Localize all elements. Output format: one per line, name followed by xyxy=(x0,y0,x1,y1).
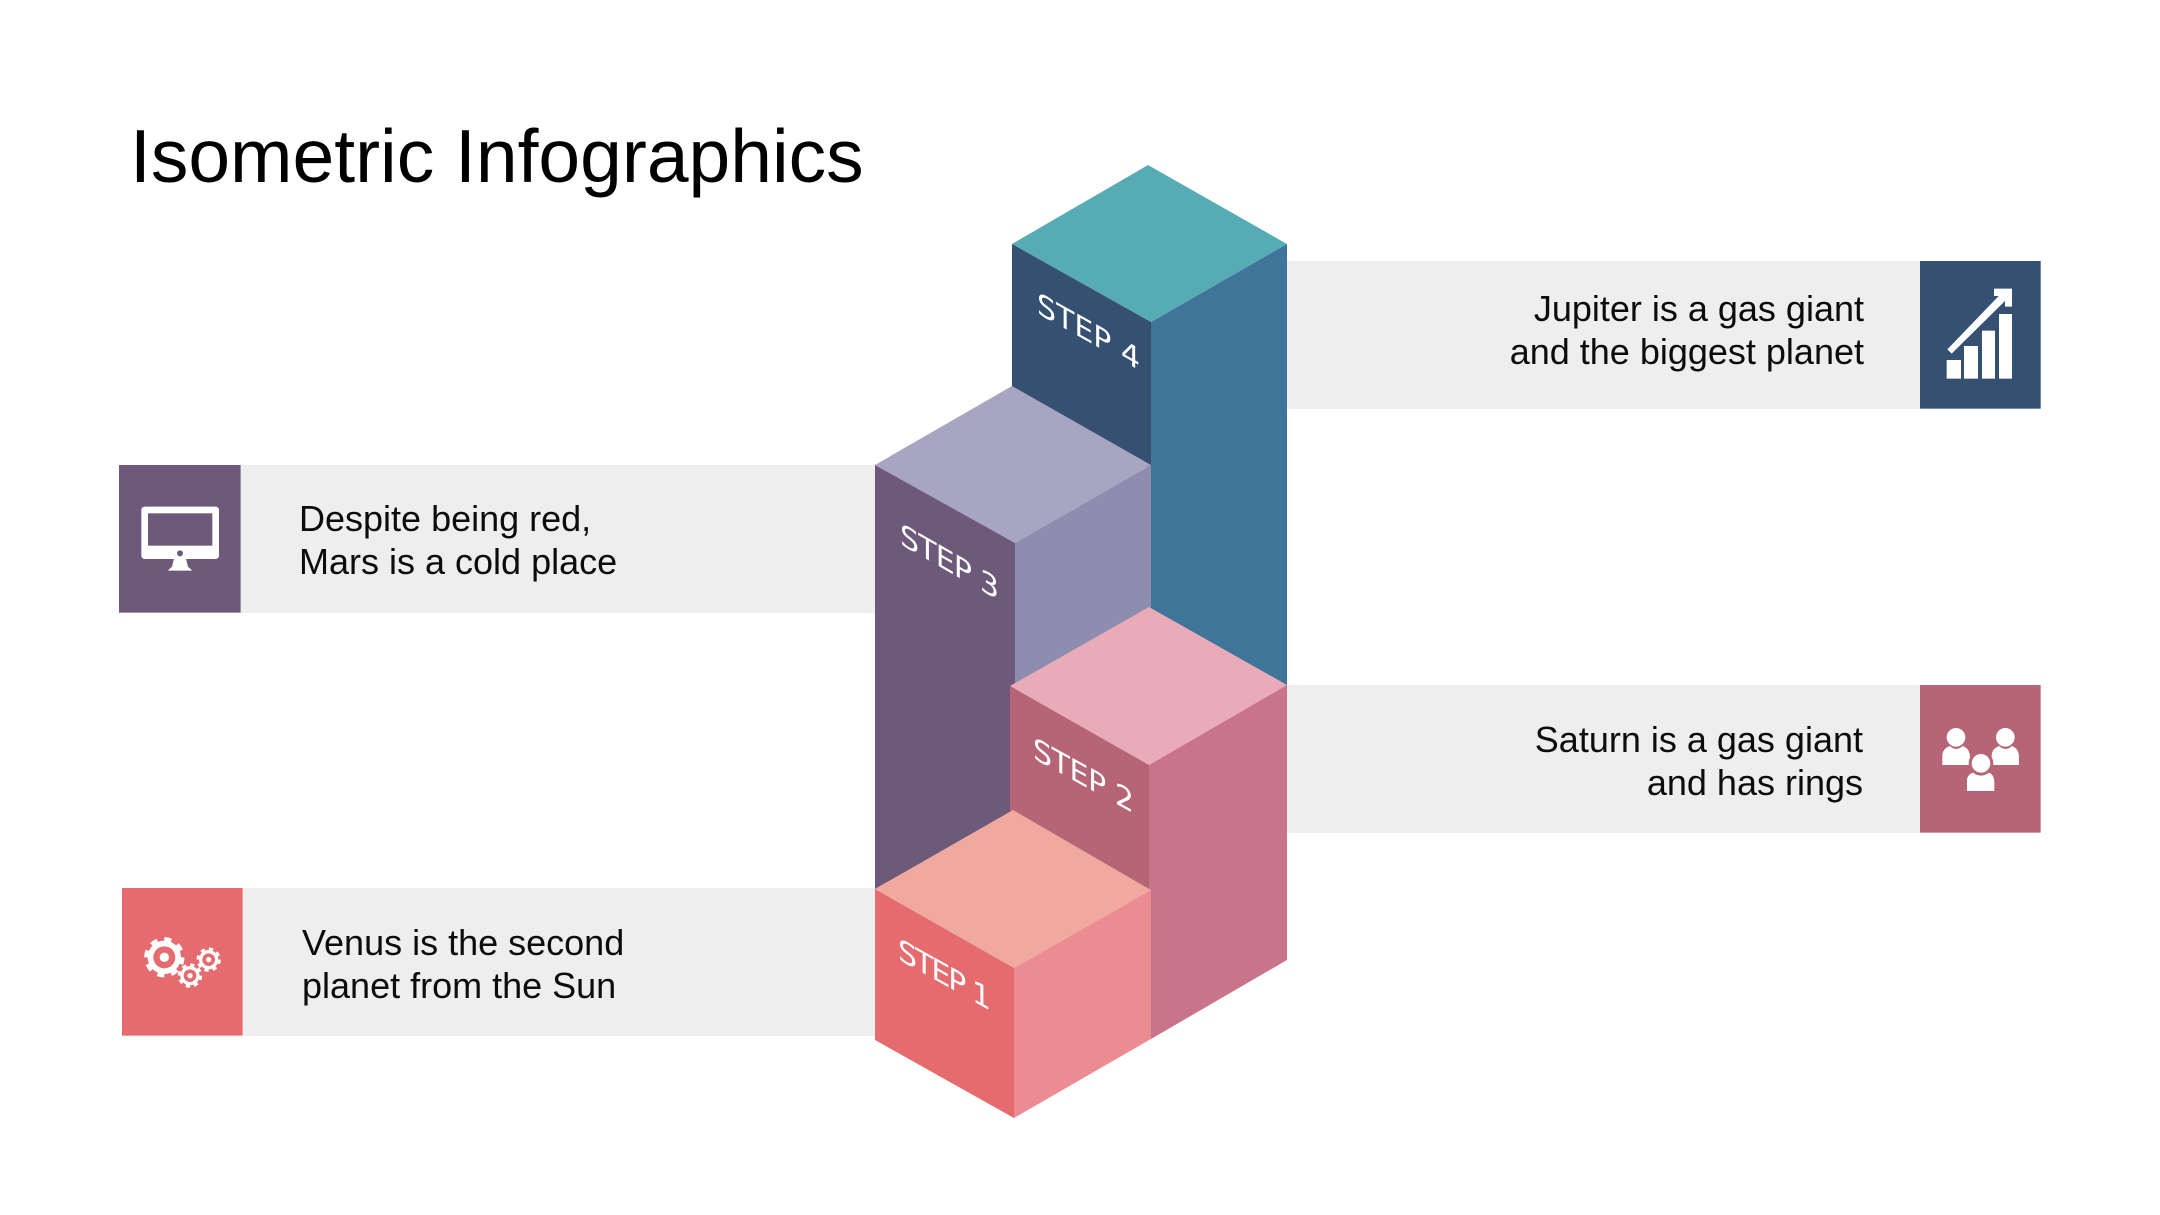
label: step 1: STEP 1 xyxy=(898,931,991,1019)
panel: step 2 Saturn xyxy=(1286,685,2041,833)
text: Saturn: and has rings xyxy=(1647,762,1863,803)
icon: growth chart xyxy=(1920,261,2041,409)
block: step 1 xyxy=(875,810,1151,1118)
icon: people xyxy=(1920,685,2041,833)
text: Venus: planet from the Sun xyxy=(302,965,616,1006)
panel: step 1 Venus xyxy=(122,888,875,1036)
label: step 2: STEP 2 xyxy=(1033,730,1134,821)
label: step 3: STEP 3 xyxy=(900,516,999,608)
panel: step 3 Mars xyxy=(119,465,875,613)
label: step 4: STEP 4 xyxy=(1037,285,1140,378)
text: Venus: Venus is the second xyxy=(302,922,624,963)
title: Isometric Infographics xyxy=(130,114,864,198)
panel: step 4 Jupiter xyxy=(1287,261,2041,409)
text: Jupiter: Jupiter is a gas giant xyxy=(1534,288,1864,329)
text: Mars: Despite being red, xyxy=(299,498,591,539)
block: step 3 xyxy=(875,386,1151,889)
text: Venus xyxy=(302,922,624,1006)
text: Saturn xyxy=(1535,719,1863,803)
icon: gears xyxy=(122,888,243,1036)
text: Mars xyxy=(299,498,617,582)
block: step 4 xyxy=(1012,165,1287,700)
text: Jupiter: and the biggest planet xyxy=(1510,331,1864,372)
text: Mars: Mars is a cold place xyxy=(299,541,617,582)
block: step 2 xyxy=(1010,607,1287,1039)
text: Jupiter xyxy=(1510,288,1864,372)
text: Saturn: Saturn is a gas giant xyxy=(1535,719,1863,760)
icon: monitor xyxy=(119,465,241,613)
